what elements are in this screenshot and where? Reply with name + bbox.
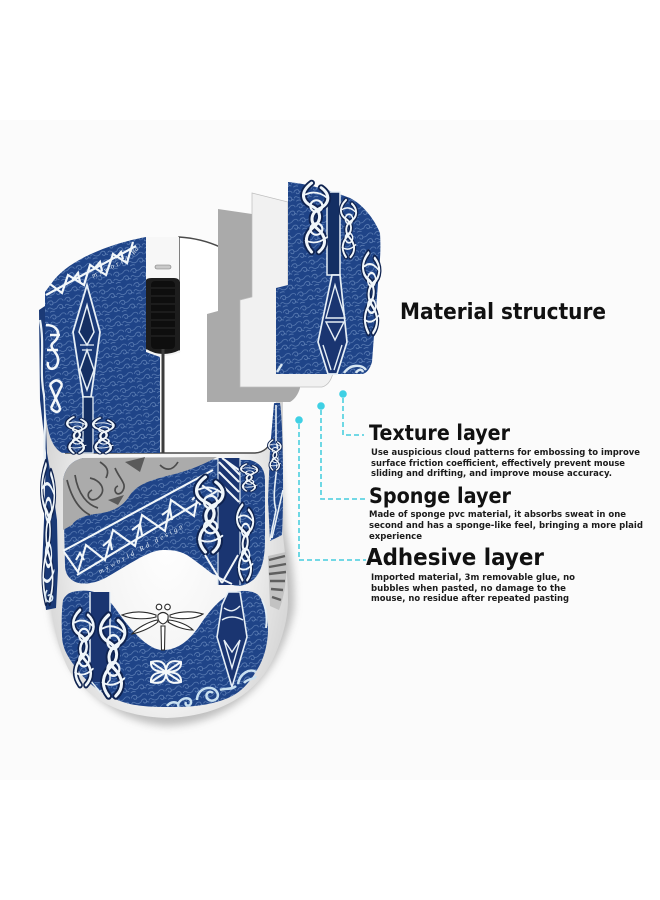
text block: sponge layer: experience bbox=[369, 532, 422, 542]
text block: adhesive layer: Imported material, 3m removable glue, no bbox=[371, 573, 575, 583]
left side strip sticker bbox=[39, 306, 58, 610]
greek key band bbox=[46, 242, 136, 295]
text block: sponge layer: Made of sponge pvc material, it absorbs sweat in one bbox=[369, 510, 626, 520]
right spear ornament bbox=[217, 592, 247, 687]
left ornament column bbox=[73, 592, 125, 696]
text block: sponge layer: second and has a sponge-like feel, bringing a more plaid bbox=[369, 521, 643, 531]
mouse shell bbox=[46, 237, 288, 718]
grey swirl area bbox=[63, 457, 217, 530]
script mark: myworld Rd design bbox=[97, 522, 184, 576]
spear ornament bbox=[73, 285, 100, 453]
right side strip sticker bbox=[268, 403, 287, 610]
right edge knots bbox=[363, 253, 379, 333]
knotwork column bbox=[197, 458, 257, 585]
thumb rest sticker bbox=[62, 591, 268, 707]
side knot bbox=[46, 325, 62, 412]
cloud curls bbox=[167, 671, 256, 707]
left button sticker bbox=[45, 237, 160, 453]
spear ornament bbox=[318, 192, 347, 374]
text block: texture layer: Use auspicious cloud patterns for embossing to improve bbox=[371, 448, 640, 458]
leader: adhesive layer bbox=[295, 416, 366, 560]
text block: adhesive layer: bubbles when pasted, no damage to the bbox=[371, 584, 566, 594]
texture layer sheet bbox=[276, 182, 380, 374]
mouse shadow bbox=[50, 420, 294, 726]
text block: texture layer bbox=[369, 421, 640, 479]
palm sticker bbox=[63, 457, 265, 586]
text block: adhesive layer: mouse, no residue after repeated pasting bbox=[371, 594, 569, 604]
text block: sponge layer: Sponge layer bbox=[369, 484, 512, 508]
right white shell panel bbox=[65, 237, 276, 453]
lower knots bbox=[67, 417, 86, 453]
text block: sponge layer bbox=[369, 484, 643, 542]
diagonal greek key band bbox=[63, 470, 217, 575]
sponge layer sheet bbox=[240, 193, 333, 387]
grey stripes bbox=[268, 552, 287, 610]
leader: texture layer bbox=[339, 390, 364, 435]
text block: texture layer: sliding and drifting, and improve mouse accuracy. bbox=[371, 469, 612, 479]
script mark: myworld bbox=[90, 255, 130, 280]
heading: material structure: Material structure bbox=[400, 300, 606, 325]
text block: texture layer: Texture layer bbox=[369, 421, 511, 445]
text block: texture layer: surface friction coefficient, effectively prevent mouse bbox=[371, 459, 625, 469]
dragonfly logo bbox=[122, 604, 203, 650]
bottom-sticker edge scallops bbox=[262, 600, 266, 628]
scroll wheel housing bbox=[146, 237, 180, 453]
small knot ornament bbox=[151, 661, 181, 683]
exploded material layers bbox=[207, 182, 380, 402]
adhesive layer sheet bbox=[207, 209, 300, 402]
leader: sponge layer bbox=[317, 402, 368, 499]
mouse body with skin stickers bbox=[39, 237, 294, 726]
text block: adhesive layer bbox=[366, 545, 575, 604]
text block: adhesive layer: Adhesive layer bbox=[366, 545, 545, 571]
bottom curls bbox=[277, 364, 366, 373]
left button sticker: Rd bbox=[129, 245, 141, 257]
upper knots bbox=[303, 183, 328, 252]
